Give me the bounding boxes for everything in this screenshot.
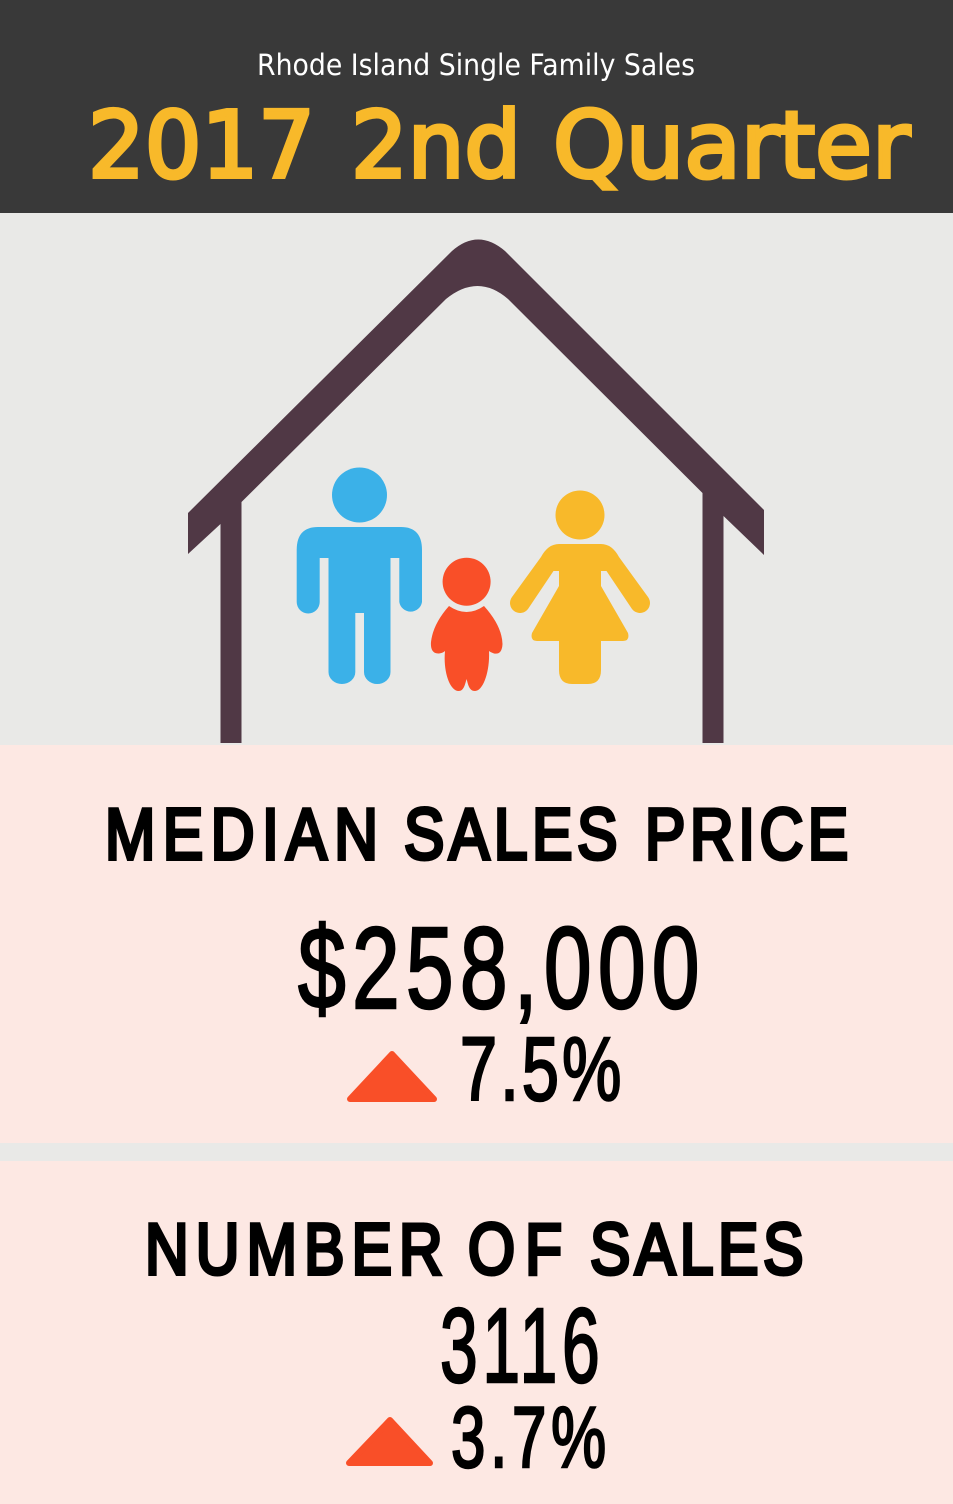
title: 2nd: [351, 92, 521, 199]
icon: up arrow: [350, 1054, 434, 1099]
heading: number of sales: SALES: [590, 1210, 808, 1290]
value: sales change: 3.7%: [451, 1389, 611, 1485]
icon: child: [431, 558, 502, 691]
value: median price: $258,000: [298, 903, 706, 1033]
heading: number of sales: [145, 1210, 808, 1290]
title: Quarter: [553, 92, 910, 199]
panel: header: [0, 0, 953, 213]
heading: median sales price: PRICE: [645, 795, 853, 875]
heading: median sales price: SALES: [404, 795, 622, 875]
heading: median sales price: MEDIAN: [105, 795, 386, 875]
icon: up arrow: [349, 1420, 430, 1463]
panel: number of sales: [0, 1161, 953, 1504]
icon: man: [297, 468, 422, 684]
subtitle: Rhode Island Single Family Sales: [257, 48, 695, 82]
heading: number of sales: OF: [468, 1210, 572, 1290]
heading: number of sales: NUMBER: [145, 1210, 450, 1290]
value: number of sales: 3116: [440, 1286, 604, 1405]
panel: median sales price: [0, 745, 953, 1143]
icon: woman: [510, 490, 650, 684]
title: 2017: [88, 92, 315, 199]
title: [88, 92, 910, 199]
heading: median sales price: [105, 795, 853, 875]
icon: house outline: [188, 240, 764, 743]
panel: family illustration: [188, 240, 764, 743]
value: price change: 7.5%: [460, 1018, 625, 1119]
